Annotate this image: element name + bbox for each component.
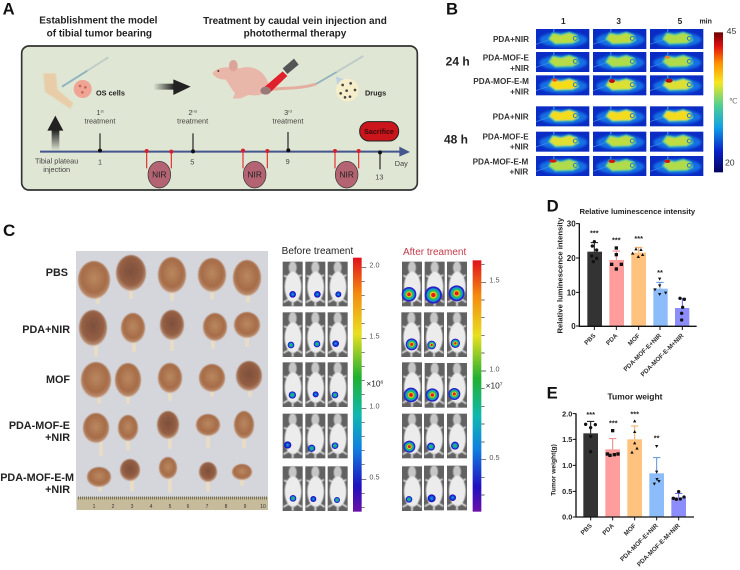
significance stars E: **: [654, 434, 660, 443]
timeline day labels: injection: [43, 165, 70, 174]
axes D: 30: [567, 220, 576, 229]
timeline day labels: [35, 156, 408, 182]
tumor group labels: [0, 267, 74, 496]
bars E: [583, 433, 686, 517]
before treatment colorbar: 0.5: [369, 472, 380, 481]
axes E: PDA-MOF-E+NIR: [619, 522, 660, 563]
tumor group labels: PDA-MOF-E-M: [0, 472, 74, 484]
tumor group labels: PBS: [46, 267, 68, 279]
column headers: 5: [678, 16, 683, 26]
axes E: PBS: [580, 522, 594, 537]
timeline day labels: Tibial plateau: [35, 156, 78, 165]
treatment labels: [85, 108, 303, 126]
arrow: tibial injection: [47, 116, 63, 151]
icon: bone and OS cells: [43, 57, 125, 109]
tumor group labels: +NIR: [45, 432, 70, 444]
panel E: tumor weight chart: [547, 384, 694, 568]
NIR markers: NIR: [247, 170, 262, 180]
before treatment mice: [283, 261, 348, 511]
axes E: 0.5: [562, 487, 572, 496]
axes E: PDA: [601, 522, 616, 537]
icon: syringe and drugs: [316, 56, 386, 101]
time labels: 24 h: [446, 54, 470, 68]
icon: syringe and drugs: Drugs: [365, 89, 386, 98]
panel letter D: D: [547, 197, 559, 216]
thermal colorbar: 20: [725, 158, 735, 168]
ruler: 1: [93, 504, 96, 510]
tumors: [78, 255, 262, 487]
data points E: [584, 419, 686, 501]
treatment labels: 3: [284, 108, 288, 117]
bioluminescence images: [282, 246, 503, 512]
heading: tibial tumor model: of tibial tumor bearing: [47, 28, 152, 39]
error bars D: [591, 243, 686, 308]
axes E: 0.0: [562, 513, 572, 522]
significance stars E: [586, 410, 660, 443]
before treatment colorbar: [353, 258, 383, 512]
axes D: PDA: [605, 332, 620, 347]
chart title E: Tumor weight: [607, 391, 663, 401]
before treatment colorbar: 6: [380, 379, 383, 385]
axes D: PDA-MOF-E-M+NIR: [640, 332, 686, 378]
timeline day labels: Day: [395, 159, 408, 168]
significance stars D: ***: [612, 235, 621, 244]
time labels: 48 h: [444, 132, 468, 146]
group labels: PDA+NIR: [493, 113, 529, 122]
timeline day labels: 9: [286, 157, 290, 166]
ruler: 9: [244, 504, 247, 510]
NIR markers: NIR: [339, 170, 354, 180]
timeline day labels: 13: [375, 173, 383, 182]
y axis label E: Tumor weight(g): [550, 444, 557, 496]
timeline day labels: 1: [98, 158, 102, 167]
after treatment colorbar: 0.5: [489, 453, 500, 462]
axes D: 20: [567, 254, 576, 263]
ruler: 10: [260, 504, 266, 510]
thermal image grid: [536, 29, 703, 176]
panel letter A: A: [3, 0, 15, 19]
tumor group labels: +NIR: [45, 484, 70, 496]
significance stars D: **: [657, 268, 663, 277]
panel D: relative luminescence chart: [547, 197, 697, 378]
ruler: 5: [169, 504, 172, 510]
NIR markers: NIR: [152, 170, 167, 180]
chart title D: Relative luminescence intensity: [579, 207, 696, 216]
after treatment colorbar: 7: [500, 382, 503, 388]
axes D: 0: [571, 322, 576, 331]
treatment labels: treatment: [85, 117, 115, 126]
group labels: PDA-MOF-E: [482, 132, 529, 141]
tumor group labels: MOF: [46, 374, 70, 386]
after treatment mice: [401, 261, 467, 511]
sacrifice badge: [360, 122, 399, 141]
timeline background panel: [22, 46, 417, 190]
significance stars D: [590, 229, 663, 277]
group labels: PDA-MOF-E: [483, 54, 530, 63]
axes E: 2.0: [562, 409, 572, 418]
thermal colorbar: 45: [727, 26, 736, 36]
ruler: 8: [225, 504, 228, 510]
axes E: 1.0: [562, 461, 572, 470]
tumor group labels: PDA+NIR: [22, 324, 70, 336]
error bars E: [587, 421, 682, 497]
panel letter C: C: [3, 221, 15, 240]
before treatment colorbar: 1.5: [369, 332, 380, 341]
group labels: +NIR: [510, 143, 529, 152]
NIR markers: [148, 161, 358, 188]
column headers: 1: [561, 16, 566, 26]
tumor photograph: [76, 251, 268, 510]
y axis label D: Relative luminescence intensity: [556, 217, 565, 334]
icon: bone and OS cells: OS cells: [96, 88, 125, 97]
column headers: [561, 16, 712, 26]
data points D: [590, 240, 686, 322]
after treatment colorbar: ×10: [486, 381, 500, 391]
arrow: model to treatment: [153, 79, 191, 95]
group labels: PDA+NIR: [493, 35, 529, 44]
bars D: [587, 252, 689, 326]
significance stars D: ***: [634, 234, 643, 243]
axes D: MOF: [627, 332, 642, 347]
significance stars E: ***: [630, 410, 639, 419]
panel B: thermal imaging: [444, 0, 737, 176]
heading: treatment: photothermal therapy: [244, 29, 347, 40]
after treatment colorbar: [473, 260, 503, 512]
before treatment colorbar: ×10: [366, 378, 380, 388]
axes D: 10: [567, 288, 576, 297]
group labels: PDA-MOF-E-M: [473, 157, 529, 166]
panel letter B: B: [446, 0, 458, 19]
significance stars E: ***: [609, 418, 618, 427]
ruler: [77, 497, 268, 510]
axes E: MOF: [623, 522, 638, 537]
ruler: 3: [131, 504, 134, 510]
icon: mouse with laser: [212, 59, 316, 99]
after treatment heading: After treament: [403, 247, 466, 258]
ruler: 2: [112, 504, 115, 510]
axes D: [567, 220, 697, 378]
time labels: [444, 54, 470, 146]
thermal colorbar: ℃: [729, 96, 737, 105]
ruler: 6: [187, 504, 190, 510]
treatment labels: treatment: [273, 117, 303, 126]
ruler: 4: [150, 504, 153, 510]
axes D: PDA-MOF-E+NIR: [622, 332, 663, 373]
axes E: 1.5: [562, 435, 572, 444]
column headers: 3: [616, 16, 621, 26]
sacrifice badge: Sacrifice: [364, 128, 394, 136]
treatment labels: nd: [192, 109, 197, 114]
heading: tibial tumor model: Establishment the model: [39, 16, 158, 27]
axes E: PDA-MOF-E-M+NIR: [636, 522, 682, 568]
thermal colorbar: [714, 26, 737, 172]
after treatment colorbar: 1.0: [489, 364, 500, 373]
group labels: +NIR: [510, 87, 529, 96]
treatment labels: 1: [96, 108, 100, 117]
after treatment colorbar: 1.5: [489, 276, 500, 285]
treatment labels: st: [100, 109, 104, 114]
axes D: PBS: [583, 332, 597, 347]
before treatment heading: Before treament: [282, 246, 353, 257]
heading: treatment: Treatment by caudal vein injection and: [203, 16, 387, 27]
tumor bones: [96, 288, 250, 491]
treatment labels: treatment: [177, 117, 208, 126]
panel letter E: E: [547, 384, 558, 403]
timeline axis: [40, 132, 410, 169]
group labels: [473, 35, 530, 176]
panel C: tumor photograph and bioluminescence: [0, 221, 503, 512]
ruler: 7: [206, 504, 209, 510]
panel A: treatment timeline: [3, 0, 417, 190]
timeline day labels: 5: [190, 158, 194, 167]
before treatment colorbar: 2.0: [369, 260, 380, 269]
group labels: PDA-MOF-E-M: [473, 77, 529, 86]
significance stars E: ***: [586, 410, 595, 419]
treatment labels: 2: [188, 108, 192, 117]
axes E: [562, 409, 694, 568]
before treatment colorbar: 1.0: [369, 402, 380, 411]
group labels: +NIR: [510, 64, 529, 73]
treatment labels: rd: [288, 109, 292, 114]
group labels: +NIR: [510, 167, 528, 176]
tumor group labels: PDA-MOF-E: [9, 420, 70, 432]
column headers: min: [699, 19, 712, 26]
significance stars D: ***: [590, 229, 599, 238]
